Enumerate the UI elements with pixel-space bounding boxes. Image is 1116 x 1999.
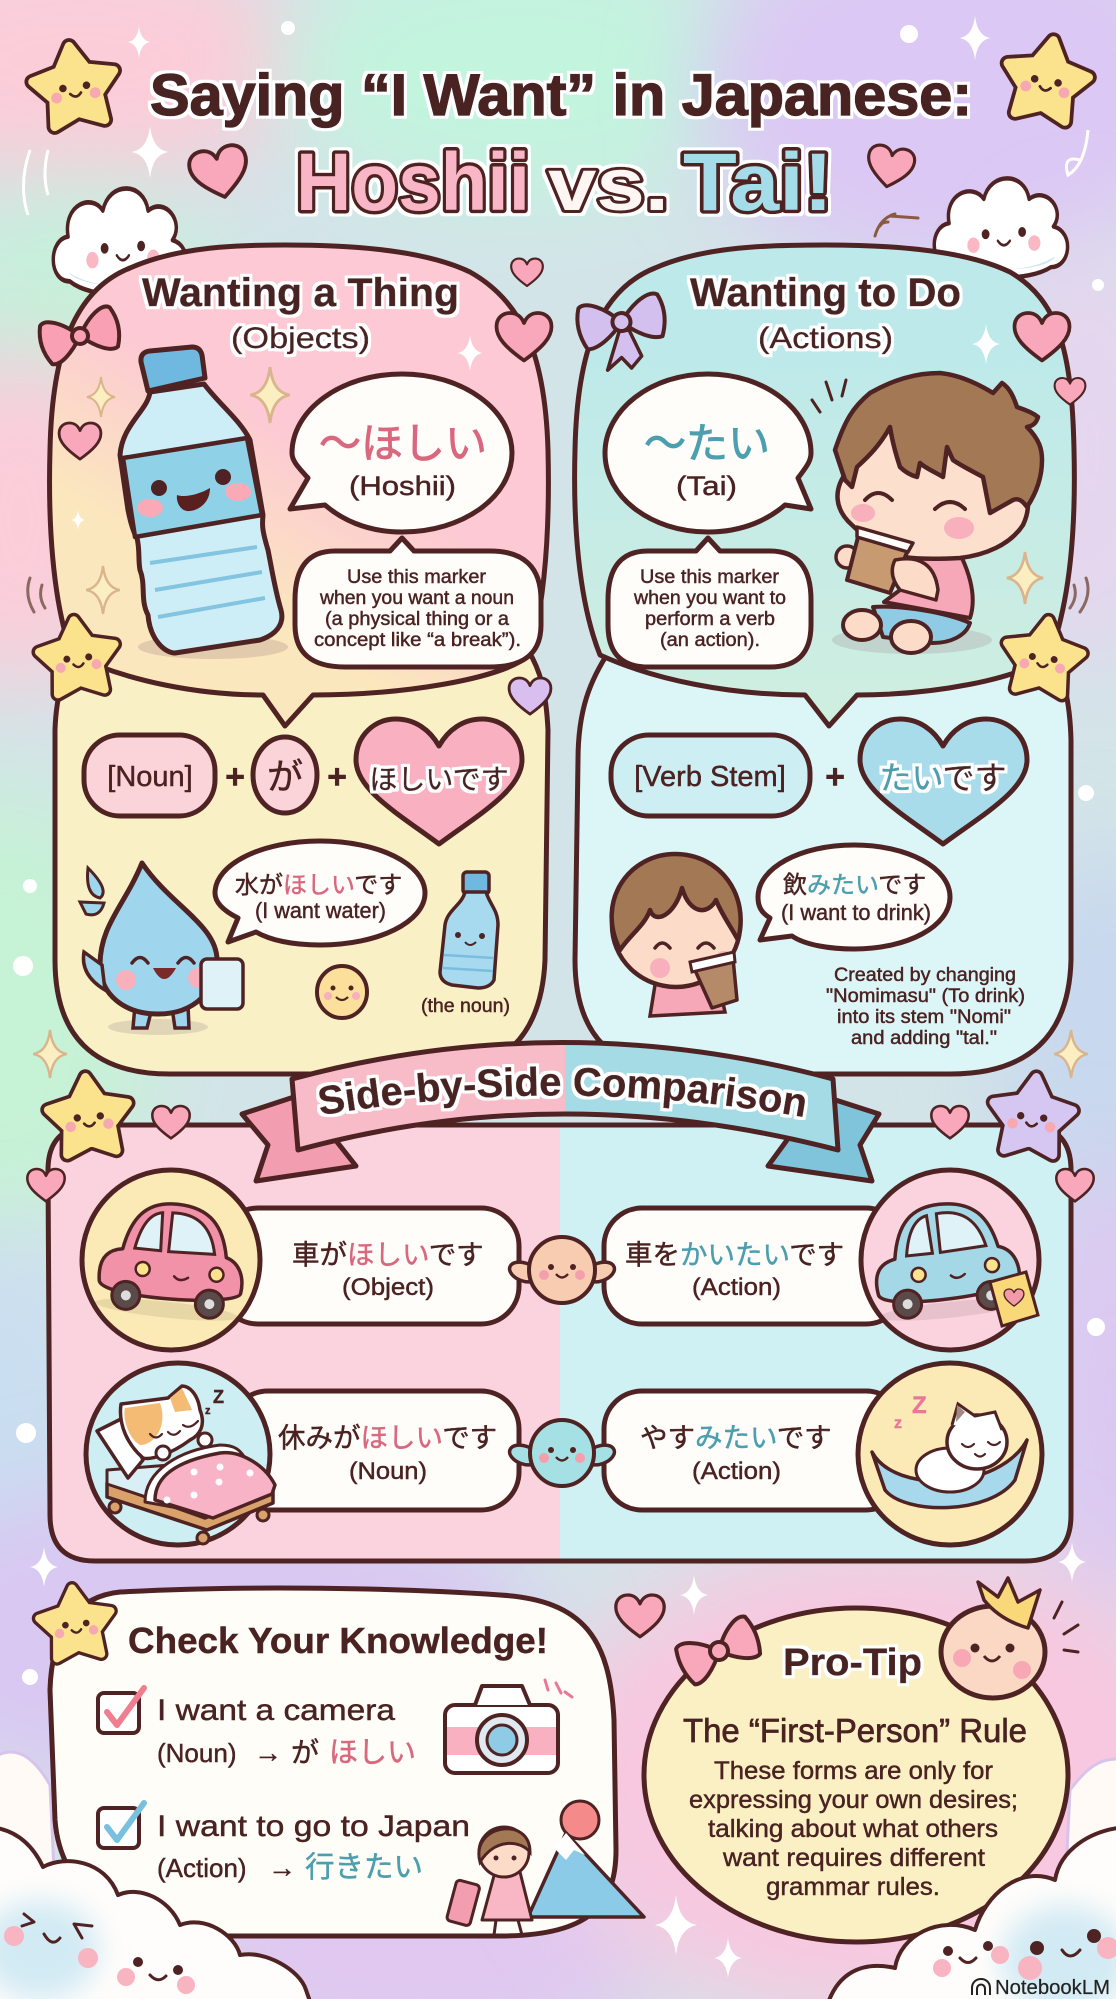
circle: ga particle xyxy=(253,737,317,813)
row: rest xyxy=(86,1363,1042,1545)
speech bubble: i want to drink: (I want to drink) xyxy=(781,900,931,925)
pill: kuruma ga hoshii: 車がほしいです xyxy=(292,1239,484,1270)
heart: tai desu: たいです xyxy=(879,760,1007,796)
pill: yasumitai xyxy=(604,1391,904,1510)
plus sign: + xyxy=(327,758,347,796)
formula: noun plus ga plus hoshii desu xyxy=(84,719,522,844)
pill: verb stem xyxy=(611,735,810,816)
icon: camera xyxy=(445,1680,572,1773)
icon: cat in hammock xyxy=(858,1363,1042,1545)
icon: girl with suitcase xyxy=(446,1827,532,1935)
item: japan question: 行きたい xyxy=(305,1851,423,1884)
title word: tai: Tai! xyxy=(683,137,833,228)
speech bubble: i want water: (I want water) xyxy=(255,898,386,923)
icon: cloud left xyxy=(53,188,187,295)
panel: formula right xyxy=(575,650,1071,1074)
panel: wanting to do xyxy=(575,245,1074,726)
icon: outline sparkles xyxy=(33,1030,1088,1078)
callout: noun marker note: when you want a noun xyxy=(319,588,514,609)
text: created by note: "Nomimasu" (To drink) xyxy=(826,986,1025,1007)
ribbon tail right xyxy=(768,1095,879,1181)
icon: mid left star xyxy=(36,616,119,696)
icon: comparison star right xyxy=(989,1073,1076,1157)
item: camera question: が xyxy=(291,1737,319,1768)
icon: heart left of title xyxy=(187,143,253,203)
icon: pink car xyxy=(82,1170,260,1350)
text: tai romaji: (Tai) xyxy=(676,471,737,501)
text: pro-tip body: These forms are only for xyxy=(714,1757,993,1785)
callout: verb marker note: Use this marker xyxy=(640,567,780,588)
speech bubble: tai xyxy=(605,374,811,532)
icon: cat in hammock: Z xyxy=(912,1392,927,1419)
icon: small bottle xyxy=(440,872,498,988)
icon: water drop character xyxy=(80,863,243,1035)
icon: small birds xyxy=(875,214,918,236)
icon: boy with cup xyxy=(612,854,741,1016)
icon: cat in bed: Z xyxy=(213,1387,224,1407)
background clouds back xyxy=(0,1752,1116,1999)
clouds: bottom right xyxy=(826,1827,1116,1999)
item: camera question: ほしい xyxy=(329,1737,416,1769)
item: camera question: (Noun) xyxy=(157,1738,236,1768)
callout: verb marker note: (an action). xyxy=(660,630,760,651)
heart: hoshii desu: ほしいです xyxy=(369,764,509,795)
title line 1: Saying “I Want” in Japanese: xyxy=(150,63,972,128)
row: car object xyxy=(82,1170,1039,1350)
pill: kuruma ga hoshii: (Object) xyxy=(342,1274,434,1301)
icon: comparison star left xyxy=(46,1074,132,1156)
pill: noun xyxy=(84,735,215,816)
text: created by note: and adding "tal." xyxy=(851,1028,997,1049)
pill: kuruma wo kaitai: 車をかいたいです xyxy=(625,1239,844,1270)
connector: peach face xyxy=(507,1237,617,1303)
callout: verb marker note xyxy=(608,538,811,667)
item: japan question xyxy=(98,1803,470,1884)
item: japan question: → xyxy=(268,1852,296,1883)
panel: pro-tip xyxy=(644,1608,1068,1942)
pill: yasumi ga hoshii: 休みがほしいです xyxy=(278,1422,497,1453)
speech bubble: i want water: 水がほしいです xyxy=(235,872,402,899)
icon: pro-tip bow xyxy=(673,1614,765,1687)
text: pro-tip body: grammar rules. xyxy=(766,1873,940,1901)
item: camera question: → xyxy=(254,1737,282,1768)
title word: hoshii: Hoshii xyxy=(296,137,530,228)
icon: cloud right xyxy=(934,178,1068,278)
text: kana hoshii: ～ほしい xyxy=(319,420,487,467)
subheading: objects: (Objects) xyxy=(231,322,370,355)
formula: verb stem plus tai desu xyxy=(611,719,1027,844)
speech bubble: i want water xyxy=(215,841,425,945)
circle: ga particle: が xyxy=(267,756,303,797)
icon: sparkles around bottle xyxy=(71,335,483,614)
icon: check panel star xyxy=(36,1584,115,1660)
icon: mt fuji and sun xyxy=(528,1801,644,1917)
pill: kuruma wo kaitai: (Action) xyxy=(692,1274,781,1301)
panel: formula left xyxy=(55,650,548,1074)
item: camera question: I want a camera xyxy=(157,1694,395,1727)
pill: yasumi ga hoshii: (Noun) xyxy=(349,1458,427,1485)
icon: cat in bed xyxy=(86,1363,275,1545)
panel: check your knowledge xyxy=(50,1588,644,1936)
icon: blue car with bag xyxy=(861,1170,1039,1350)
icon: mid right star xyxy=(1001,615,1086,697)
pill: yasumitai: やすみたいです xyxy=(640,1422,832,1453)
banner: side-by-side comparison xyxy=(240,1040,882,1184)
pill: kuruma wo kaitai xyxy=(604,1208,904,1324)
speech bubble: i want to drink xyxy=(758,845,950,949)
text: pro-tip body xyxy=(689,1757,1018,1901)
callout: noun marker note xyxy=(295,538,541,667)
icon: crowned face xyxy=(941,1578,1078,1698)
callout: noun marker note: (a physical thing or a xyxy=(325,609,509,630)
callout: noun marker note: Use this marker xyxy=(347,567,487,588)
text: kana tai: ～たい xyxy=(644,420,770,467)
icon: small heart left xyxy=(59,423,101,459)
icon: top left star xyxy=(28,41,120,129)
speech bubble: i want to drink: 飲みたいです xyxy=(783,872,926,899)
text: pro-tip body: talking about what others xyxy=(708,1815,998,1843)
text: created by note: into its stem "Nomi" xyxy=(837,1007,1011,1028)
heading: wanting to do: Wanting to Do xyxy=(690,271,961,315)
subheading: actions: (Actions) xyxy=(758,322,893,355)
checkbox: blue xyxy=(98,1803,144,1848)
ribbon band xyxy=(292,1042,838,1150)
title xyxy=(150,63,972,228)
icon: small smiley xyxy=(317,966,367,1018)
text: hoshii romaji: (Hoshii) xyxy=(349,471,456,501)
icon: heart right of title xyxy=(864,143,916,191)
checkbox: pink xyxy=(98,1688,144,1733)
icon: cat in hammock: z xyxy=(894,1415,902,1432)
subheading: first-person rule: The “First-Person” Rule xyxy=(683,1712,1027,1749)
icon: boy drinking xyxy=(812,373,1042,654)
pill: yasumitai: (Action) xyxy=(692,1458,781,1485)
title word: vs: vs. xyxy=(548,143,669,226)
panel: side-by-side comparison xyxy=(48,1125,1071,1561)
item: japan question: (Action) xyxy=(157,1853,247,1883)
connector: blue face xyxy=(507,1420,617,1486)
icon: white sparkle right xyxy=(972,324,1000,364)
pill: yasumi ga hoshii xyxy=(230,1391,519,1510)
callout: verb marker note: when you want to xyxy=(633,588,786,609)
speech bubble: hoshii xyxy=(290,374,512,532)
panel: wanting a thing xyxy=(50,245,548,726)
callout: noun marker note: concept like “a break”). xyxy=(314,630,521,651)
label: the noun: (the noun) xyxy=(421,996,510,1017)
clouds: bottom left xyxy=(0,1827,313,1999)
text: created by note: Created by changing xyxy=(834,965,1016,986)
icon: water bottle xyxy=(120,347,288,659)
heart: tai desu xyxy=(860,719,1027,844)
heading: pro-tip: Pro-Tip xyxy=(783,1642,922,1684)
heading: check your knowledge: Check Your Knowledge! xyxy=(128,1620,548,1661)
icon: hearts on top panels xyxy=(496,259,1085,714)
icon: side squiggles xyxy=(28,578,1088,612)
pill: noun: [Noun] xyxy=(107,761,193,793)
pill: kuruma ga hoshii xyxy=(220,1208,519,1324)
text: pro-tip body: want requires different xyxy=(722,1844,985,1872)
icon: bow left xyxy=(36,305,124,366)
watermark: notebooklm: NotebookLM xyxy=(995,1977,1110,1999)
icon: pro-tip heart xyxy=(616,1595,664,1637)
icon: top right star xyxy=(1000,33,1094,124)
text: created by note xyxy=(826,965,1025,1049)
callout: verb marker note: perform a verb xyxy=(645,609,775,630)
plus sign: + xyxy=(825,758,845,796)
text: pro-tip body: expressing your own desires; xyxy=(689,1786,1018,1814)
ribbon tail left xyxy=(242,1095,356,1181)
banner text: Side-by-Side Comparison xyxy=(316,1063,808,1120)
icon: cat in bed: z xyxy=(205,1405,211,1417)
plus sign: + xyxy=(225,758,245,796)
heart: hoshii desu xyxy=(356,719,522,844)
icon: comparison hearts xyxy=(27,1106,1094,1201)
icon: gold sparkle right xyxy=(1007,552,1043,604)
pill: verb stem: [Verb Stem] xyxy=(634,761,786,793)
item: camera question xyxy=(98,1688,416,1769)
heading: wanting a thing: Wanting a Thing xyxy=(142,271,459,315)
item: japan question: I want to go to Japan xyxy=(157,1810,470,1843)
icon: bow lavender xyxy=(575,292,673,376)
